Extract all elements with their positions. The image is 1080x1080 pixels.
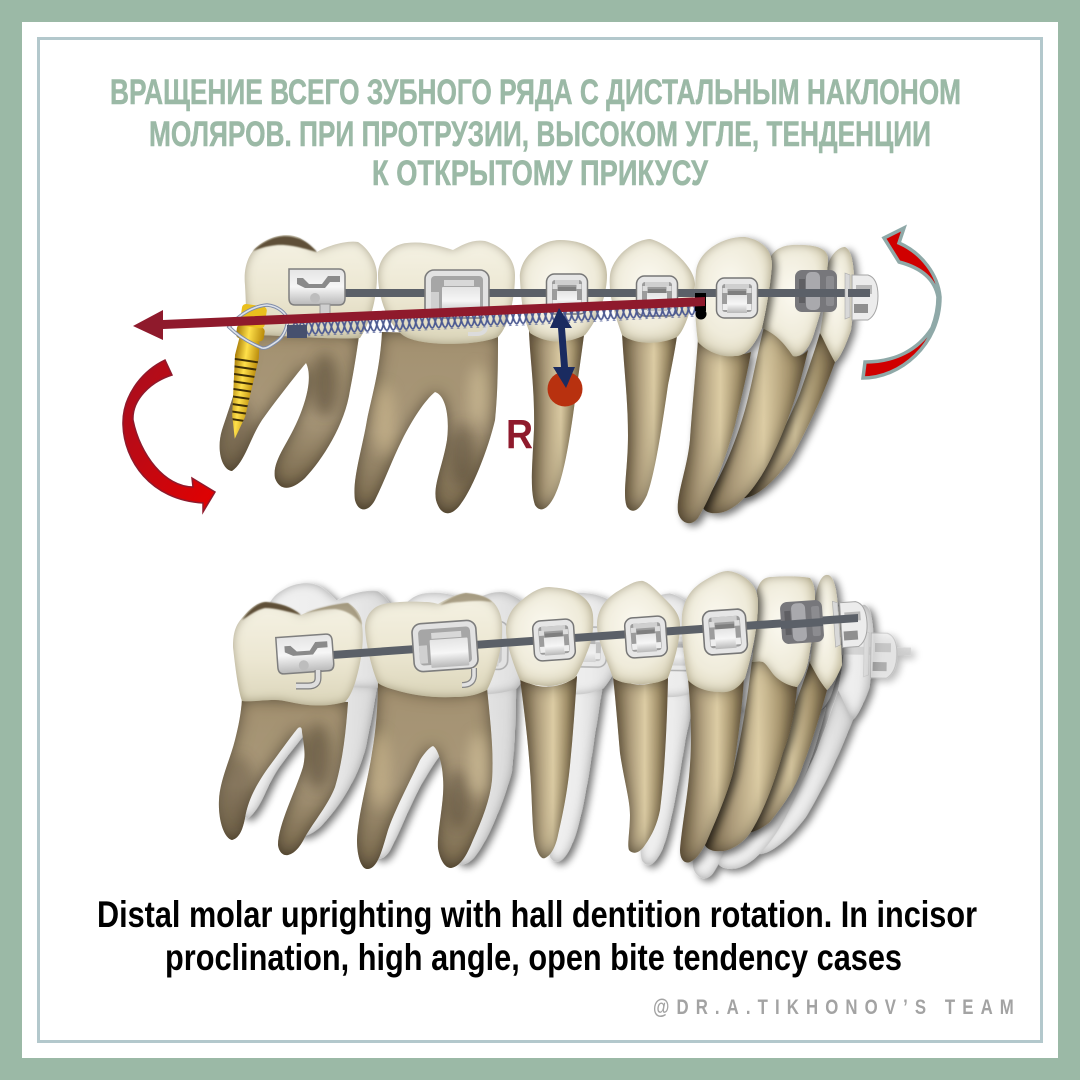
archwire and brackets	[289, 269, 878, 334]
ghost teeth: original position	[235, 582, 912, 882]
arrow: left curved rotation	[123, 360, 215, 512]
caption in English	[97, 894, 977, 978]
elastic ligature	[229, 305, 307, 348]
caption in English: proclination, high angle, open bite tendency cases	[165, 937, 902, 978]
rotated teeth	[219, 571, 842, 869]
coil spring	[292, 302, 698, 337]
panel: upper dentition before rotation with mechanics	[123, 228, 940, 523]
credit: @DR.A.TIKHONOV’S TEAM	[653, 996, 1014, 1020]
teeth row	[220, 235, 854, 523]
label: R: R	[506, 411, 533, 457]
arrow: red force line	[133, 297, 705, 340]
marker: centre of resistance	[548, 372, 582, 406]
panel: lower dentition after rotation	[219, 571, 912, 882]
arrow: right curved rotation	[863, 228, 940, 378]
title in Russian: К ОТКРЫТОМУ ПРИКУСУ	[372, 154, 709, 193]
icon: gold miniscrew	[232, 304, 267, 439]
archwire and brackets	[276, 599, 869, 686]
hook and black stop	[695, 293, 706, 320]
title in Russian	[110, 73, 961, 193]
arrow: blue double-headed	[550, 308, 575, 388]
